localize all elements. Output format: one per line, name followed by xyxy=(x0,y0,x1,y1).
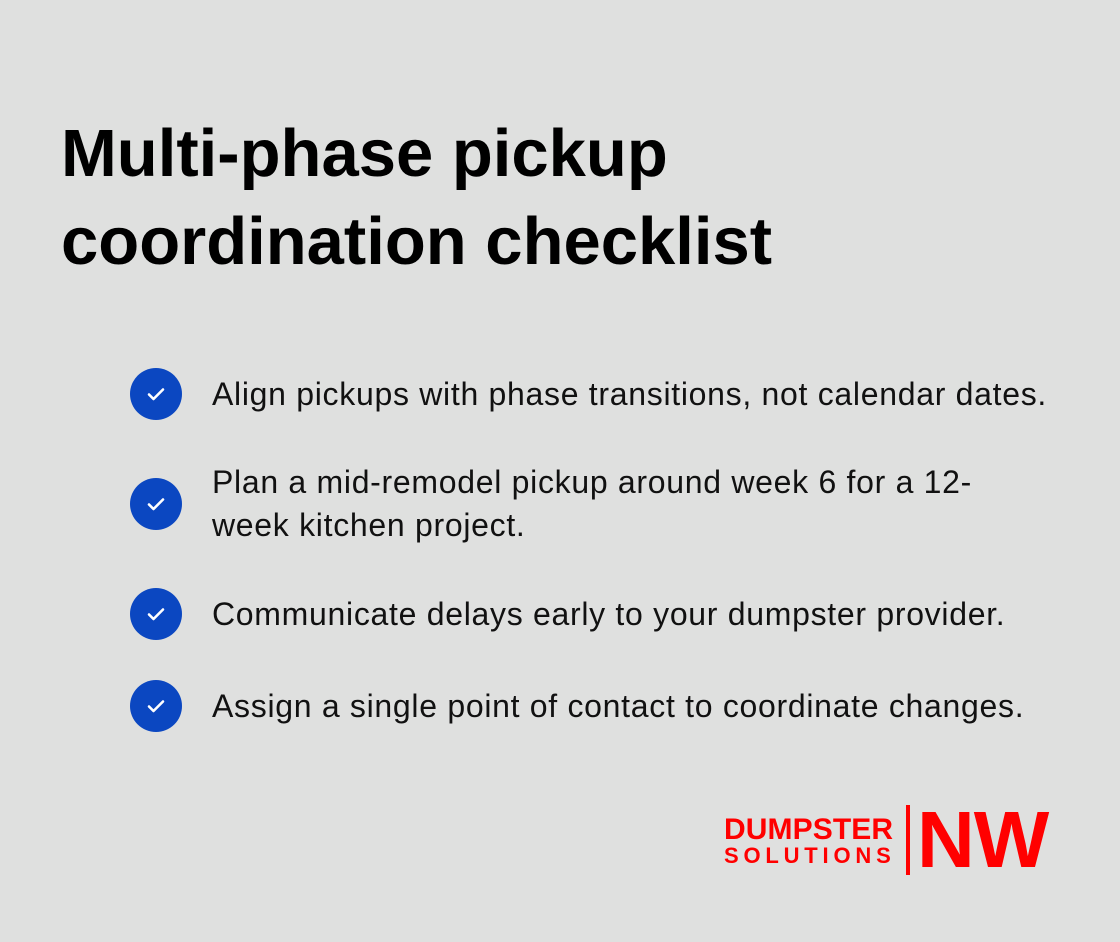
checklist item 4 xyxy=(130,680,1024,732)
logo: DUMPSTER xyxy=(724,813,893,846)
text: Communicate delays early to your dumpster provider. xyxy=(212,596,1005,632)
title: Multi-phase pickup xyxy=(61,116,668,191)
title: coordination checklist xyxy=(61,204,772,279)
checklist item 1 xyxy=(130,368,1047,420)
checklist item 3 xyxy=(130,588,1005,640)
text: Align pickups with phase transitions, not calendar dates. xyxy=(212,376,1047,412)
icon: check xyxy=(130,478,182,530)
logo xyxy=(724,795,1050,884)
icon: check xyxy=(130,588,182,640)
icon: check xyxy=(130,368,182,420)
text xyxy=(212,464,972,543)
logo: SOLUTIONS xyxy=(724,843,896,868)
text: Plan a mid-remodel pickup around week 6 for a 12- xyxy=(212,464,972,500)
text: week kitchen project. xyxy=(212,507,526,543)
logo: NW xyxy=(917,795,1048,884)
text: Assign a single point of contact to coordinate changes. xyxy=(212,688,1024,724)
checklist item 2 xyxy=(130,464,972,543)
icon: check xyxy=(130,680,182,732)
title xyxy=(61,116,772,279)
